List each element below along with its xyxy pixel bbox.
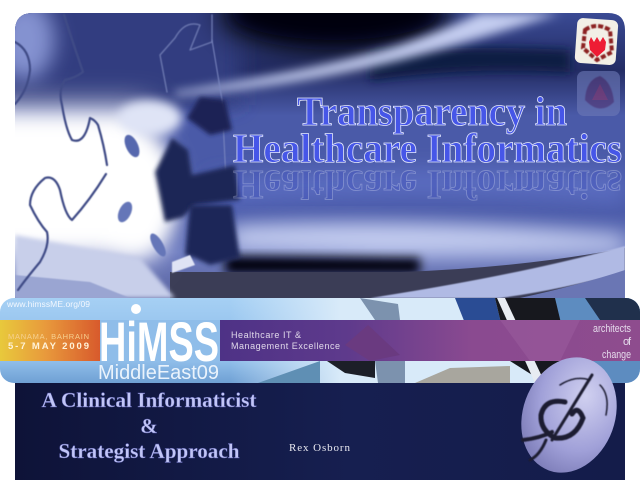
tagline [231, 330, 340, 351]
architects of change [593, 323, 632, 361]
lower navy panel [15, 383, 625, 480]
subtitle: A Clinical Informaticist [42, 388, 256, 412]
lower bands [230, 223, 625, 256]
title line 1: Transparency in [297, 88, 567, 134]
puzzle pieces [15, 15, 226, 290]
title [233, 88, 622, 171]
architects of change: change [602, 349, 631, 361]
orange date stripe [0, 320, 100, 361]
author: Rex Osborn [289, 442, 350, 454]
centre puzzle knob [115, 97, 240, 273]
MiddleEast09: MiddleEast09 [98, 362, 219, 384]
tagline: Healthcare IT & [231, 330, 301, 340]
subtitle: Strategist Approach [58, 439, 240, 463]
dates: 5-7 MAY 2009 [8, 341, 89, 352]
title line 2: Healthcare Informatics [233, 125, 622, 171]
architects of change: of [623, 336, 632, 348]
title reflection: Healthcare Informatics [233, 162, 622, 208]
purple tagline stripe [220, 320, 640, 361]
subtitle: & [140, 414, 158, 438]
HIMSS logo: HiMSS [99, 310, 219, 373]
tagline: Management Excellence [231, 341, 340, 351]
left light areas [0, 0, 55, 80]
logo: Bahrain crest [574, 18, 618, 65]
architects of change: architects [593, 323, 631, 335]
dark top band [220, 0, 450, 50]
banner sky [0, 298, 640, 383]
subtitle [42, 388, 256, 463]
badge: caduceus [506, 344, 632, 480]
banner [0, 298, 640, 384]
light streaks [175, 13, 560, 96]
banner building photo [258, 298, 640, 383]
website url: www.himssME.org/09 [6, 299, 90, 309]
background panel: hero image [0, 0, 625, 298]
left dark area [15, 13, 246, 111]
location: MANAMA, BAHRAIN [8, 332, 89, 341]
HIMSS logo [99, 304, 219, 373]
logo: crest reflection [577, 71, 620, 116]
